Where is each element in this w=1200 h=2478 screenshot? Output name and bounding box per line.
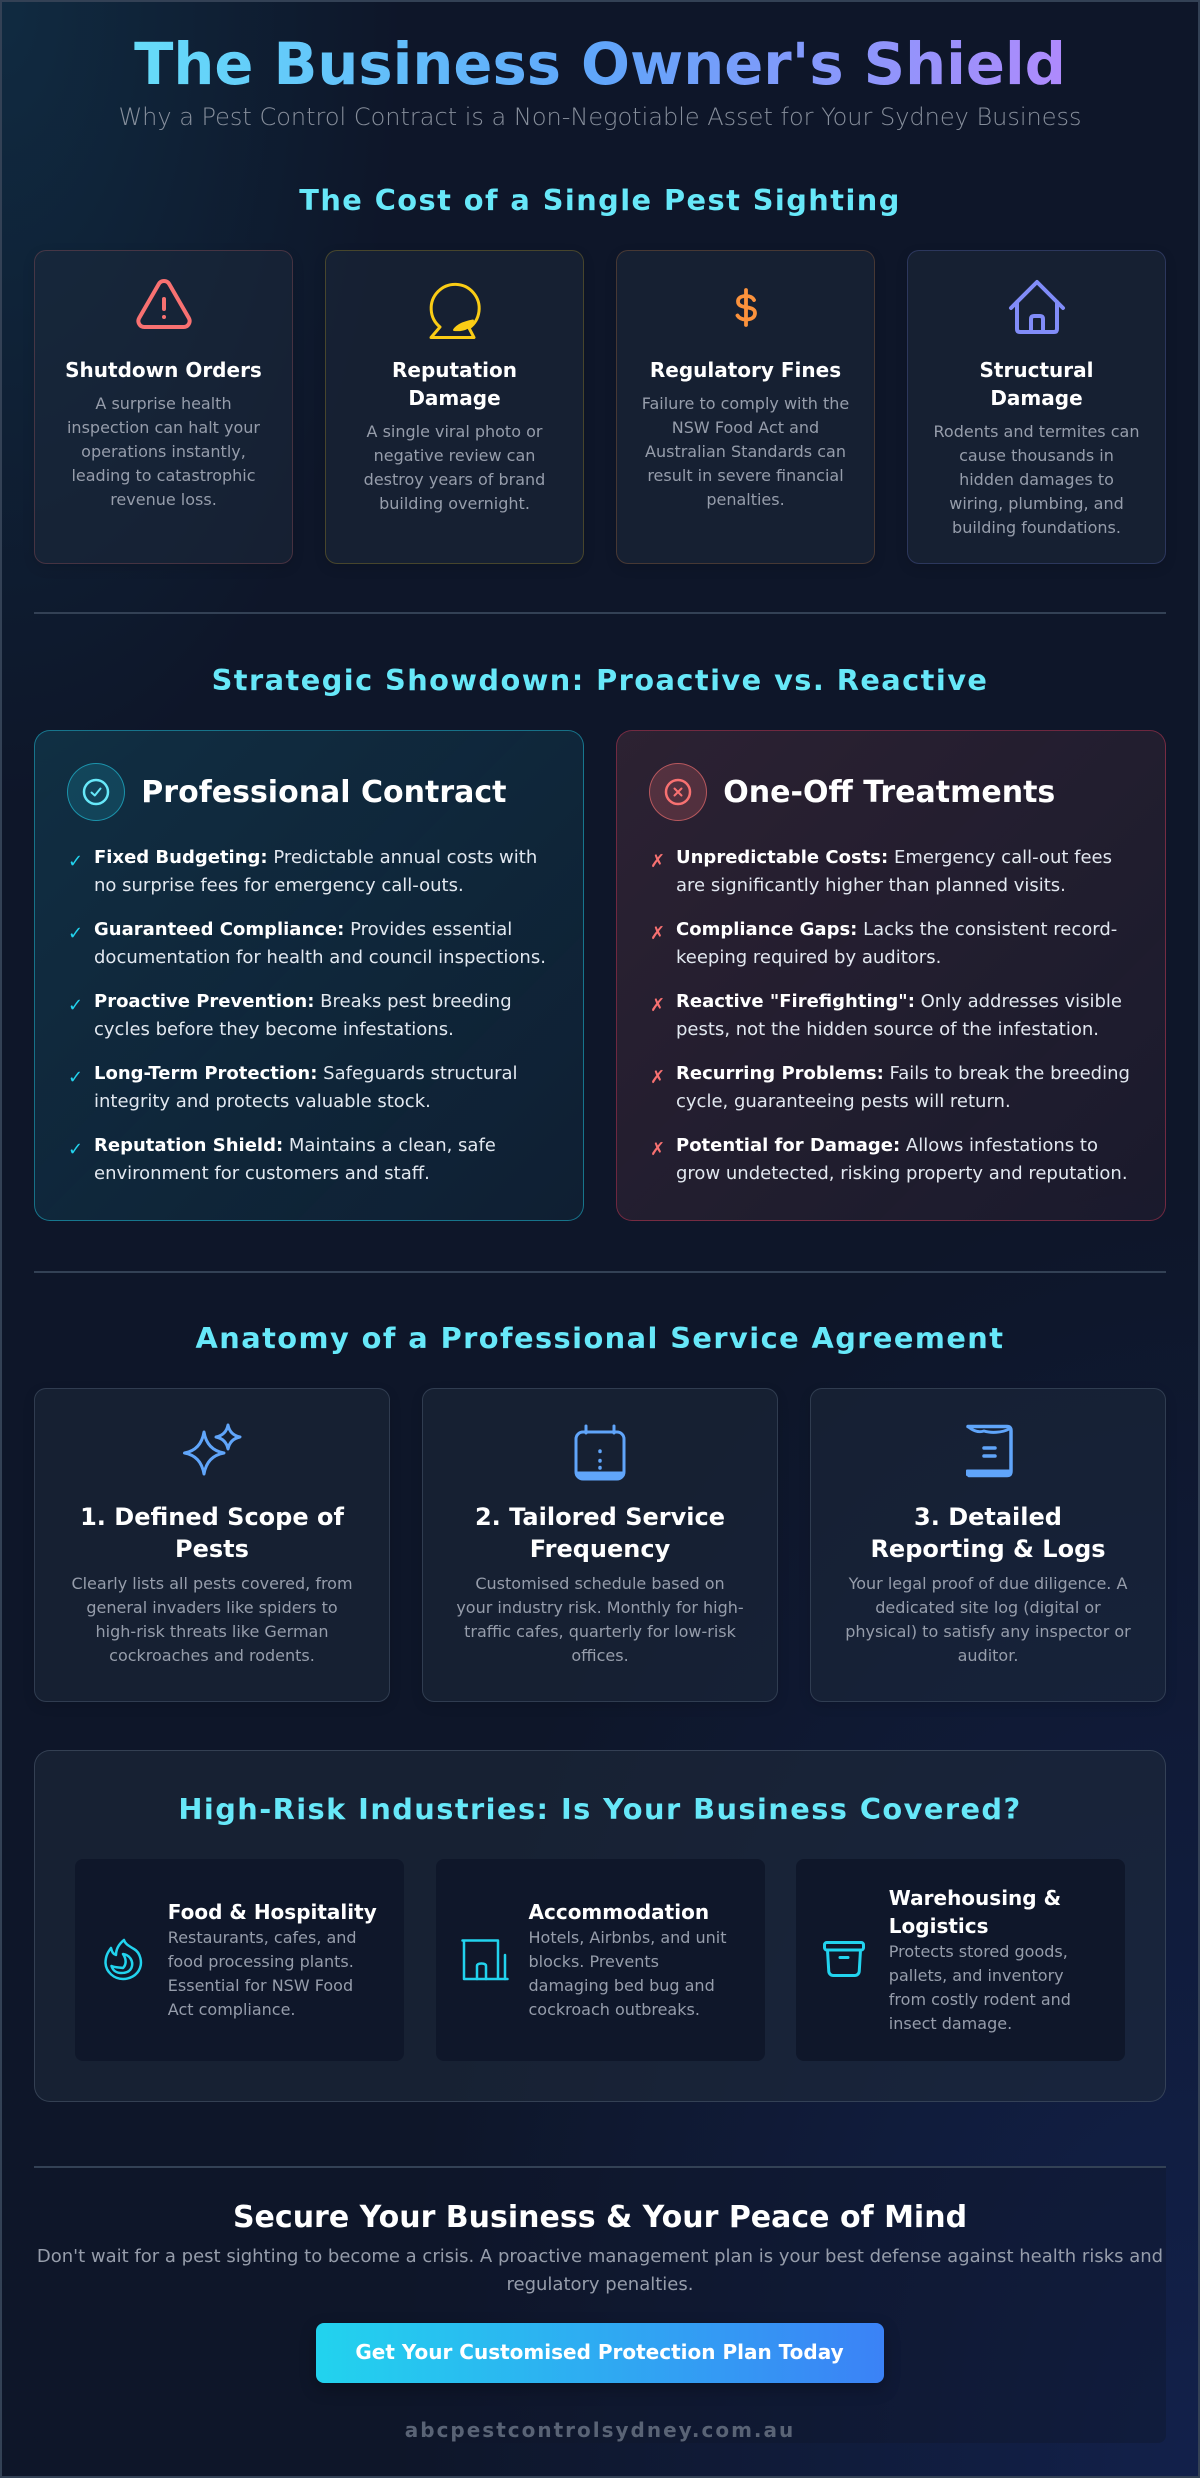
list item [650,847,1112,896]
list item [650,991,1122,1040]
icon: cross circle [649,763,707,821]
icon: flame [104,1938,142,1980]
panel: reputation damage [325,250,584,564]
icon: scroll log [966,1424,1013,1478]
card text: Clearly lists all pests covered, from [71,1574,353,1593]
card heading: Structural [980,358,1093,382]
benefit list [68,847,546,1184]
icon: calendar [574,1424,626,1480]
industry heading [889,1886,1061,1938]
list item [650,919,1117,968]
list item: Reactive "Firefighting": Only addresses visible [676,991,1122,1012]
call to action button: Get Your Customised Protection Plan Today [355,2340,844,2364]
panel: structural damage [907,250,1166,564]
panel: professional contract [34,730,584,1221]
list item: Recurring Problems: Fails to break the breeding [676,1063,1130,1084]
list item: ✓ [68,1067,83,1088]
list item: ✓ [68,995,83,1016]
card text: cockroaches and rodents. [109,1646,315,1665]
panel: high-risk industries [34,1750,1166,2102]
industry text [889,1942,1071,2033]
card text: Australian Standards can [645,442,846,461]
card text: result in severe financial [647,466,844,485]
card heading: 3. Detailed [914,1503,1062,1531]
card text: hidden damages to [959,470,1114,489]
card heading: Pests [175,1535,249,1563]
list item: Long-Term Protection: Safeguards structural [94,1063,518,1084]
list item: are significantly higher than planned visits. [676,875,1066,896]
card text: inspection can halt your [67,418,260,437]
card heading: Reporting & Logs [870,1535,1106,1563]
card heading [475,1503,725,1563]
card text: cause thousands in [959,446,1114,465]
list item [68,919,546,968]
footer text: regulatory penalties. [507,2274,693,2295]
icon: warning triangle [136,279,192,329]
card text: Rodents and termites can [934,422,1139,441]
industry text: Essential for NSW Food [168,1976,353,1995]
card heading [392,358,517,410]
industry text: damaging bed bug and [528,1976,715,1995]
card text [71,1574,353,1665]
list item [650,1135,1128,1184]
card text [934,422,1139,537]
card text: traffic cafes, quarterly for low-risk [464,1622,736,1641]
website address: abcpestcontrolsydney.com.au [405,2418,795,2442]
card heading: 2. Tailored Service [475,1503,725,1531]
panel heading: Professional Contract [141,775,507,810]
card text: Customised schedule based on [475,1574,725,1593]
panel: one-off treatments [616,730,1166,1221]
card heading: Damage [990,386,1083,410]
card heading [980,358,1093,410]
industry heading: Logistics [889,1914,989,1938]
panel: detailed reporting [810,1388,1166,1702]
industry heading: Food & Hospitality [168,1900,377,1924]
industry text [168,1928,357,2019]
footer text: Don't wait for a pest sighting to become a crisis. A proactive management plan is your best defense against health risks and [37,2246,1163,2267]
card text: leading to catastrophic [71,466,256,485]
list item: ✗ [650,923,665,944]
list item: no surprise fees for emergency call-outs. [94,875,464,896]
card text: general invaders like spiders to [86,1598,338,1617]
card heading: Frequency [530,1535,670,1563]
list item [650,1063,1130,1112]
panel: defined scope [34,1388,390,1702]
list item: ✗ [650,851,665,872]
industry text: Protects stored goods, [889,1942,1068,1961]
list item: Reputation Shield: Maintains a clean, safe [94,1135,496,1156]
card text: physical) to satisfy any inspector or [845,1622,1131,1641]
icon: dollar [736,288,757,327]
heading: industries: High-Risk Industries: Is Your Business Covered? [178,1792,1022,1826]
title: The Business Owner's Shield [134,31,1066,98]
list item: integrity and protects valuable stock. [94,1091,431,1112]
card text: Your legal proof of due diligence. A [849,1574,1127,1593]
industry text: food processing plants. [168,1952,354,1971]
list item: grow undetected, risking property and reputation. [676,1163,1128,1184]
industry heading: Accommodation [528,1900,709,1924]
industry text: insect damage. [889,2014,1012,2033]
card heading [870,1503,1106,1563]
list item: cycles before they become infestations. [94,1019,454,1040]
list item: Compliance Gaps: Lacks the consistent record- [676,919,1117,940]
industry text: pallets, and inventory [889,1966,1064,1985]
footer text [37,2246,1163,2295]
industry text: Hotels, Airbnbs, and unit [528,1928,727,1947]
icon: sparkles [183,1424,242,1476]
card text [456,1574,744,1665]
list item [68,1063,518,1112]
card text [845,1574,1131,1665]
heading: cost section: The Cost of a Single Pest Sighting [299,182,901,216]
card text: NSW Food Act and [672,418,819,437]
card text: high-risk threats like German [96,1622,328,1641]
list item: ✓ [68,1139,83,1160]
card text: building foundations. [952,518,1121,537]
card heading: Reputation [392,358,517,382]
panel heading: One-Off Treatments [723,775,1055,810]
list item [68,1135,496,1184]
drawback list [650,847,1130,1184]
list item: ✗ [650,1139,665,1160]
heading: anatomy section: Anatomy of a Professional Service Agreement [196,1320,1004,1354]
icon: archive box [823,1941,865,1977]
list item: Unpredictable Costs: Emergency call-out fees [676,847,1112,868]
panel: tailored frequency [422,1388,778,1702]
list item: Fixed Budgeting: Predictable annual costs with [94,847,537,868]
card heading: Shutdown Orders [65,358,262,382]
icon: check circle [67,763,125,821]
card text: building overnight. [379,494,530,513]
list item: Potential for Damage: Allows infestations to [676,1135,1098,1156]
list item: ✗ [650,995,665,1016]
card text: auditor. [958,1646,1018,1665]
industry text: blocks. Prevents [528,1952,659,1971]
card heading: Regulatory Fines [650,358,841,382]
card heading: 1. Defined Scope of [80,1503,344,1531]
card text: A surprise health [95,394,232,413]
icon: house [1008,280,1066,334]
list item: documentation for health and council inspections. [94,947,546,968]
industry: accommodation [436,1859,765,2061]
list item: ✓ [68,923,83,944]
list item: environment for customers and staff. [94,1163,430,1184]
industry: food and hospitality [75,1859,404,2061]
card text: revenue loss. [110,490,217,509]
card heading: Damage [408,386,501,410]
card text: your industry risk. Monthly for high- [456,1598,744,1617]
list item: ✗ [650,1067,665,1088]
industry text: from costly rodent and [889,1990,1071,2009]
list item: Guaranteed Compliance: Provides essential [94,919,512,940]
list item [68,991,512,1040]
industry: warehousing and logistics [796,1859,1125,2061]
list item: ✓ [68,851,83,872]
industry heading: Warehousing & [889,1886,1061,1910]
card text: negative review can [374,446,535,465]
footer heading: Secure Your Business & Your Peace of Mind [233,2200,967,2235]
list item: cycle, guaranteeing pests will return. [676,1091,1011,1112]
industry text: Act compliance. [168,2000,296,2019]
list item: Proactive Prevention: Breaks pest breeding [94,991,512,1012]
card text: destroy years of brand [364,470,545,489]
card text: wiring, plumbing, and [949,494,1124,513]
card text: penalties. [706,490,785,509]
footer section [34,2166,1166,2443]
list item [68,847,537,896]
industry text: Restaurants, cafes, and [168,1928,357,1947]
card heading [80,1503,344,1563]
card text [364,422,545,513]
card text: dedicated site log (digital or [875,1598,1101,1617]
list item: keeping required by auditors. [676,947,941,968]
card text [642,394,849,509]
heading: showdown section: Strategic Showdown: Proactive vs. Reactive [212,662,988,696]
card text [67,394,260,509]
icon: building [461,1939,509,1980]
industry text: cockroach outbreaks. [528,2000,700,2019]
industry text [528,1928,727,2019]
card text: A single viral photo or [367,422,542,441]
card text: Failure to comply with the [642,394,849,413]
card text: operations instantly, [81,442,246,461]
icon: speech bubble [430,282,481,339]
list item: pests, not the hidden source of the infestation. [676,1019,1099,1040]
subtitle: Why a Pest Control Contract is a Non-Negotiable Asset for Your Sydney Business [118,103,1082,131]
call to action button [316,2323,884,2383]
panel: shutdown orders [34,250,293,564]
panel: regulatory fines [616,250,875,564]
card text: offices. [571,1646,629,1665]
